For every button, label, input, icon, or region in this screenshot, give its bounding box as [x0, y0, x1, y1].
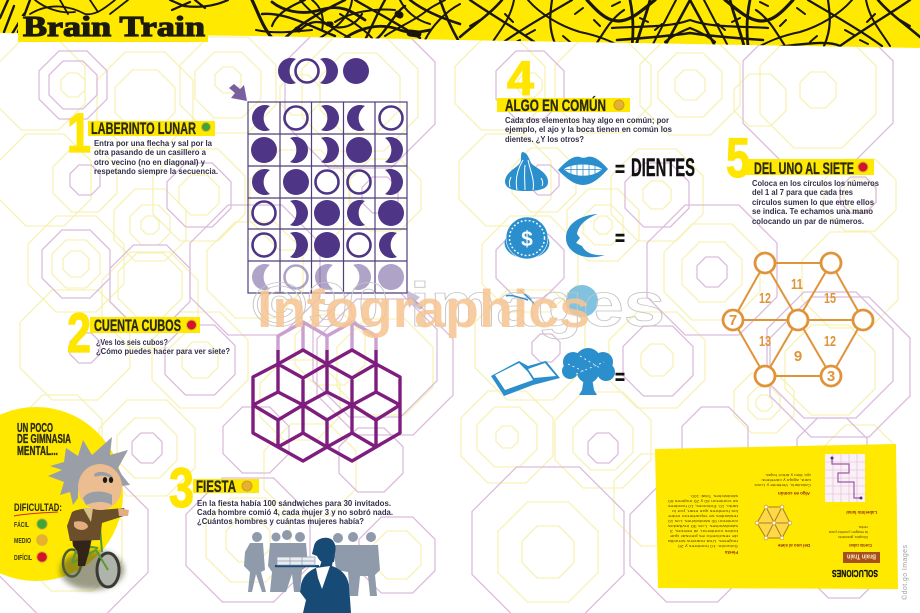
heading 5: DEL UNO AL SIETE — [754, 160, 854, 178]
heading 1: LABERINTO LUNAR — [91, 120, 196, 138]
example answer — [615, 154, 695, 182]
moon maze grid — [248, 102, 407, 293]
equals sign row 3: = — [615, 367, 625, 389]
heading bar 2 — [90, 317, 200, 333]
slogan: DE GIMNASIA — [17, 432, 71, 446]
icon: tree — [562, 348, 615, 395]
solution: fiesta: mujeres. Una manera sencilla — [667, 539, 738, 544]
icon: exit arrow — [406, 290, 424, 310]
solution hexagon diagram — [755, 505, 792, 540]
triangle number diagram — [723, 253, 873, 386]
icon: coin: $ — [521, 228, 533, 251]
heading bar 3 — [193, 479, 259, 493]
legs — [72, 538, 92, 566]
solution: fiesta: sándwiches. Total: 100. — [690, 494, 738, 499]
solution: fiesta: de resolverlo es pensar que — [669, 534, 738, 539]
hair — [48, 437, 130, 505]
description 1: otro vecino (no en diagonal) y — [94, 158, 206, 167]
moon sequence — [278, 58, 369, 84]
description 5: del 1 al 7 para que cada tres — [752, 188, 854, 197]
header band with scribbles — [0, 0, 920, 50]
panel: solutions (upside down) — [655, 444, 898, 589]
difficulty dot: hard — [858, 162, 868, 172]
solution maze — [825, 454, 865, 502]
triangle number diagram: 7 — [729, 312, 737, 329]
legend labels — [14, 520, 33, 562]
illustration: party guests and waiter — [244, 530, 380, 613]
solution: cuenta cubos: verlos. — [858, 525, 868, 530]
section badge — [843, 552, 880, 563]
triangle number diagram: 12 — [824, 333, 836, 350]
description 1: Entra por una flecha y sal por la — [94, 139, 213, 148]
legend labels: DIFÍCIL — [14, 553, 33, 562]
character: cartoon scientist on bicycle — [48, 437, 130, 590]
solutions content rotated — [667, 454, 880, 578]
rear wheel — [63, 550, 81, 576]
answer word: DIENTES — [631, 154, 695, 182]
underline — [14, 512, 58, 516]
puzzle 4: algo en común — [497, 53, 673, 144]
solution: fiesta: Fiesta — [725, 549, 738, 555]
heading 3: FIESTA — [196, 478, 236, 496]
description 2 — [96, 338, 230, 356]
eyebrow hair — [94, 472, 113, 478]
description 1: respetando siempre la secuencia. — [94, 167, 218, 176]
solution: algo en común: Calcularlo, Vertiente y Luna: — [754, 483, 811, 488]
solution: fiesta: comieron 90 sándwiches. Los 10 — [667, 519, 738, 524]
solution: fiesta: se comieron 40 y 20 mujeres 60 — [667, 499, 738, 504]
description 1: otra pasando de un casillero a — [94, 148, 207, 157]
solution: fiesta: los hombres que eran, por lo — [671, 509, 738, 514]
description 4: dientes. ¿Y los otros? — [505, 135, 584, 144]
shirt — [83, 508, 93, 522]
difficulty dot: easy — [202, 122, 210, 132]
jacket — [67, 508, 127, 541]
solution: algo en común — [754, 473, 811, 496]
waiter silhouette — [300, 538, 351, 613]
waiter shirt — [316, 566, 330, 589]
heading bar 5 — [745, 159, 874, 175]
triangle number diagram: 12 — [759, 290, 771, 307]
title: Brain Train — [23, 11, 205, 43]
description 5: Coloca en los círculos los números — [752, 179, 880, 188]
triangle number diagram: 9 — [794, 348, 802, 365]
description 5: colocando un par de números. — [752, 217, 864, 226]
solutions heading: SOLUCIONES — [832, 567, 878, 578]
triangle number diagram: 15 — [824, 290, 836, 307]
solution: cuenta cubos — [828, 525, 872, 548]
cube figure — [253, 322, 400, 461]
icon: coin — [504, 217, 550, 259]
icon: entry arrow — [229, 84, 247, 101]
description 1 — [94, 139, 218, 176]
watermark — [252, 271, 665, 340]
solution: cuenta cubos: Dibujarla, giramiento — [837, 535, 868, 540]
description 4 — [505, 116, 673, 144]
description 3: En la fiesta había 100 sándwiches para 30 invitados. — [197, 499, 391, 508]
description 4: ejemplo, el ajo y la boca tienen en común los — [505, 125, 673, 134]
puzzle 5: del uno al siete — [726, 126, 880, 226]
solution: laberinto lunar: Laberinto lunar — [846, 509, 877, 515]
legend dots — [37, 519, 47, 562]
moustache — [83, 492, 112, 505]
solution: cuenta cubos: Cuenta cubos — [849, 542, 872, 548]
watermark outline text: ©90 images — [252, 271, 665, 340]
number 1: 1 — [67, 101, 91, 164]
heading bar 1 — [88, 121, 215, 136]
number 4: 4 — [507, 53, 534, 106]
yellow circle — [0, 407, 123, 581]
description 5 — [752, 179, 880, 226]
side panel: difficulty legend — [0, 407, 123, 581]
heading 2: CUENTA CUBOS — [94, 317, 181, 335]
description 5: se indica. Te echamos una mano — [752, 207, 873, 216]
icon: mouth with teeth — [558, 157, 608, 185]
solution: del uno al siete: Del uno al siete — [778, 542, 810, 548]
description 3: ¿Cuántos hombres y cuántas mujeres había? — [197, 517, 364, 526]
solution: algo en común: Algo en común — [778, 490, 810, 496]
bicycle frame — [72, 528, 108, 570]
solution: fiesta: Solución: 10 hombres y 20 — [677, 544, 738, 549]
legend labels: FÁCIL — [14, 520, 30, 529]
section badge: Brain Train — [847, 552, 876, 562]
solution: algo en común: cara, aguja y carretera: — [761, 478, 811, 483]
equals sign row 2: = — [615, 228, 625, 250]
icon: moon — [566, 214, 605, 257]
description 3 — [197, 499, 393, 526]
solution: cuenta cubos: la imagen; pruebo para — [828, 530, 868, 535]
puzzle 1: laberinto lunar — [67, 101, 218, 176]
heading 4: ALGO EN COMÚN — [505, 96, 606, 115]
triangle number diagram: 3 — [827, 368, 835, 385]
eyes — [103, 477, 113, 483]
heading bar 4 — [497, 98, 630, 112]
description 2: ¿Ves los seis cubos? — [96, 338, 168, 347]
description 4: Cada dos elementos hay algo en común; por — [505, 116, 669, 125]
solution: fiesta: todos comieron, al menos, 3 — [669, 529, 738, 534]
puzzle 2: cuenta cubos — [67, 301, 230, 364]
description 2: ¿Cómo puedes hacer para ver siete? — [96, 347, 230, 356]
slogan — [17, 421, 71, 458]
legend labels: MEDIO — [14, 538, 31, 545]
number 2: 2 — [67, 301, 91, 364]
icon: garlic — [505, 152, 548, 191]
front wheel — [97, 553, 119, 587]
solution: fiesta: tanto, 10. Entonces, 10 hombres — [668, 504, 738, 509]
puzzle 3: fiesta — [169, 456, 393, 526]
difficulty dot: hard — [186, 320, 196, 330]
watermark filled text: Infographics — [257, 280, 590, 339]
difficulty dot: medium — [614, 100, 624, 110]
icon: third row faded objects — [506, 285, 598, 317]
hands — [74, 508, 129, 530]
number 5: 5 — [726, 126, 750, 189]
difficulty heading: DIFICULTAD: — [14, 502, 62, 514]
solution: fiesta — [667, 494, 738, 555]
difficulty dot: medium — [242, 481, 252, 491]
slogan: MENTAL... — [17, 444, 58, 458]
slogan: UN POCO — [17, 421, 53, 435]
triangle number diagram: 11 — [791, 276, 803, 293]
description 3: Cada hombre comió 4, cada mujer 3 y no sobró nada. — [197, 508, 393, 517]
description 5: círculos sumen lo que entre ellos — [752, 198, 875, 207]
triangle number diagram: 13 — [759, 333, 771, 350]
number 3: 3 — [169, 456, 194, 519]
solution: fiesta: restantes se repartieron entre — [667, 514, 738, 519]
solution: algo en común: ojo; libro y árbol: hojas. — [765, 473, 811, 478]
photo credit: ©dot.go Images — [901, 544, 909, 600]
soft shadow — [60, 550, 124, 590]
guest silhouettes — [244, 530, 380, 596]
head — [78, 464, 122, 510]
solution: fiesta: sándwiches. Los 30 invitados — [668, 524, 738, 529]
panel background — [655, 444, 898, 589]
equals sign: = — [615, 159, 625, 181]
icon: book — [491, 361, 560, 396]
tray with sandwiches — [275, 557, 319, 567]
